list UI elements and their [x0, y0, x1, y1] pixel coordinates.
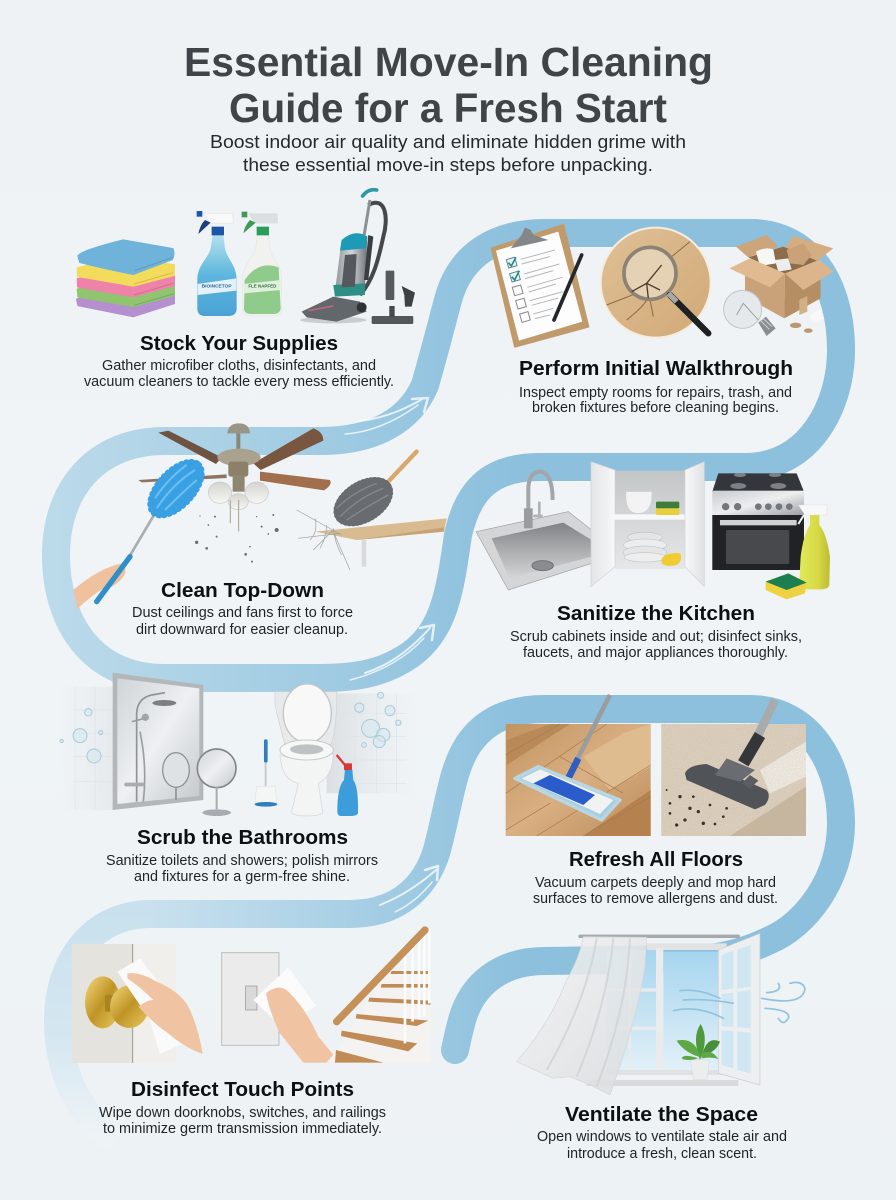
illustration: sink, cabinet, stove, cleaner	[476, 462, 830, 599]
icon: dust specks	[195, 514, 279, 563]
subtitle	[210, 132, 686, 175]
icon: upright vacuum	[300, 190, 415, 324]
description	[510, 629, 802, 661]
description: Vacuum carpets deeply and mop hard	[535, 875, 776, 891]
description: Inspect empty rooms for repairs, trash, and	[519, 385, 792, 401]
icon: soap bubbles	[60, 692, 401, 763]
icon: steel sink and faucet	[476, 472, 592, 590]
panel: clean top-down	[73, 423, 447, 638]
title: Essential Move-In Cleaning	[184, 39, 713, 85]
icon: round vanity mirror	[197, 749, 236, 816]
icon: ceiling fan	[138, 423, 331, 532]
panel: refresh all floors	[506, 695, 806, 907]
description	[533, 875, 778, 907]
description	[106, 853, 378, 885]
icon: shelf with cobweb and grey duster	[297, 452, 447, 570]
illustration: doorknob, switch, stair railing	[72, 929, 431, 1063]
icon: wall mirror with shower	[113, 673, 203, 810]
panel: sanitize the kitchen	[476, 462, 830, 661]
icon: yellow cleaner and sponge	[766, 505, 830, 599]
icon: magnifier over cracked wood	[601, 228, 711, 338]
heading: Disinfect Touch Points	[131, 1078, 354, 1101]
heading: Scrub the Bathrooms	[137, 826, 348, 849]
description: Scrub cabinets inside and out; disinfect sinks,	[510, 629, 802, 645]
icon: toilet brush	[255, 739, 277, 807]
icon: blue spray bottle	[337, 755, 358, 816]
icon: potted plant	[677, 1024, 720, 1079]
icon: light bulb and debris	[724, 290, 824, 336]
panel: stock your supplies	[77, 190, 415, 390]
description: and fixtures for a germ-free shine.	[134, 869, 350, 885]
icon: wiping a doorknob	[72, 944, 203, 1063]
illustration: clipboard, magnifier, box, bulb	[492, 225, 833, 347]
ribbon path: lower loop	[58, 709, 841, 1140]
ribbon path: upper loop	[56, 233, 841, 678]
panel: disinfect touch points	[72, 929, 431, 1137]
illustration: mop and vacuum on floors	[506, 695, 806, 836]
icon: clipboard checklist	[492, 225, 588, 347]
description: dirt downward for easier cleanup.	[136, 622, 348, 638]
illustration: mirror, toilet, brush, spray	[60, 673, 417, 816]
description: introduce a fresh, clean scent.	[567, 1146, 757, 1162]
heading: Sanitize the Kitchen	[557, 602, 755, 625]
description: surfaces to remove allergens and dust.	[533, 891, 778, 907]
icon: blue spray bottle: BIOINCETOP	[202, 284, 232, 289]
panel: perform initial walkthrough	[492, 225, 833, 416]
description: vacuum cleaners to tackle every mess efficiently.	[84, 374, 394, 390]
subtitle: Boost indoor air quality and eliminate hidden grime with	[210, 132, 686, 152]
description	[84, 358, 394, 390]
description: Dust ceilings and fans first to force	[132, 605, 353, 621]
icon: wind swirls	[673, 982, 805, 1022]
description: to minimize germ transmission immediately.	[103, 1121, 382, 1137]
illustration: open window with curtain and plant	[517, 933, 805, 1095]
icon: staircase with wooden rail	[327, 929, 431, 1063]
description	[537, 1129, 787, 1162]
description	[519, 385, 792, 416]
title: Guide for a Fresh Start	[229, 85, 667, 131]
icon: cardboard box	[729, 235, 833, 318]
tile backdrops	[60, 687, 417, 810]
icon: wiping a light switch	[222, 953, 340, 1063]
icon: open cabinet with dishes	[591, 462, 704, 587]
icon: mop on hardwood floor	[506, 695, 651, 836]
icon: blue extendable duster with hand	[73, 452, 211, 609]
arrows on ribbon	[345, 398, 438, 912]
icon: green spray bottle: FLE NAPFED	[248, 284, 276, 289]
description: Wipe down doorknobs, switches, and railings	[99, 1105, 386, 1121]
description	[99, 1105, 386, 1137]
icon: green spray bottle	[242, 212, 282, 316]
illustration: ceiling fan, dusters, shelf	[73, 423, 447, 609]
description: faucets, and major appliances thoroughly.	[523, 645, 788, 661]
description: Sanitize toilets and showers; polish mirrors	[106, 853, 378, 869]
heading: Refresh All Floors	[569, 848, 743, 871]
icon: sheer curtain	[517, 937, 647, 1095]
panel: ventilate the space	[517, 933, 805, 1162]
heading: Clean Top-Down	[161, 579, 324, 602]
icon: stove and oven	[712, 473, 804, 570]
icon: microfiber cloth stack	[77, 240, 174, 316]
icon: toilet	[275, 684, 337, 816]
panel: scrub the bathrooms	[60, 673, 417, 885]
heading: Perform Initial Walkthrough	[519, 357, 793, 380]
description: Open windows to ventilate stale air and	[537, 1129, 787, 1145]
heading: Stock Your Supplies	[140, 332, 338, 355]
icon: blue spray bottle	[197, 211, 237, 316]
title	[184, 39, 713, 131]
description	[132, 605, 353, 638]
subtitle: these essential move-in steps before unpacking.	[243, 155, 653, 175]
icon: window frame	[578, 933, 760, 1086]
illustration: cloths, spray bottles, vacuum	[77, 190, 415, 324]
description: broken fixtures before cleaning begins.	[532, 400, 779, 416]
heading: Ventilate the Space	[565, 1103, 758, 1126]
icon: vacuum on carpet	[661, 700, 806, 836]
description: Gather microfiber cloths, disinfectants, and	[102, 358, 376, 374]
